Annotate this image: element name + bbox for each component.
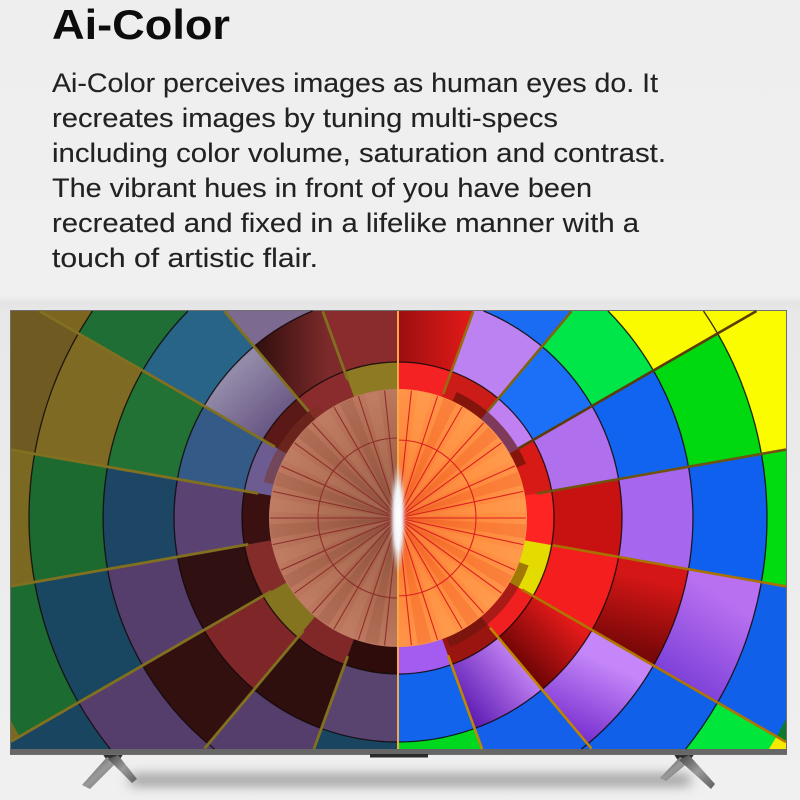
centre white flash (390, 462, 406, 574)
inner disc: muted half (269, 389, 405, 647)
screen half: vivid Ai-Color (399, 310, 786, 750)
screen half: muted original colours (10, 310, 397, 750)
TV screen: balloon comparison (11, 311, 786, 749)
title: Ai-Color (52, 1, 230, 48)
body text block: The vibrant hues in front of you have been (52, 173, 592, 203)
inner disc: vivid half (391, 389, 527, 647)
body text block: including color volume, saturation and contrast. (52, 138, 666, 168)
centre divider line (397, 311, 399, 749)
body text block: touch of artistic flair. (52, 243, 318, 273)
body text block (52, 68, 666, 273)
body text block: Ai-Color perceives images as human eyes do. It (52, 68, 659, 98)
TV stand: left foot (82, 753, 137, 789)
floor shadow under TV (130, 775, 690, 785)
TV frame (10, 310, 787, 758)
body text block: recreates images by tuning multi-specs (52, 103, 558, 133)
TV stand: right foot (660, 753, 715, 789)
body text block: recreated and fixed in a lifelike manner with a (52, 208, 640, 238)
